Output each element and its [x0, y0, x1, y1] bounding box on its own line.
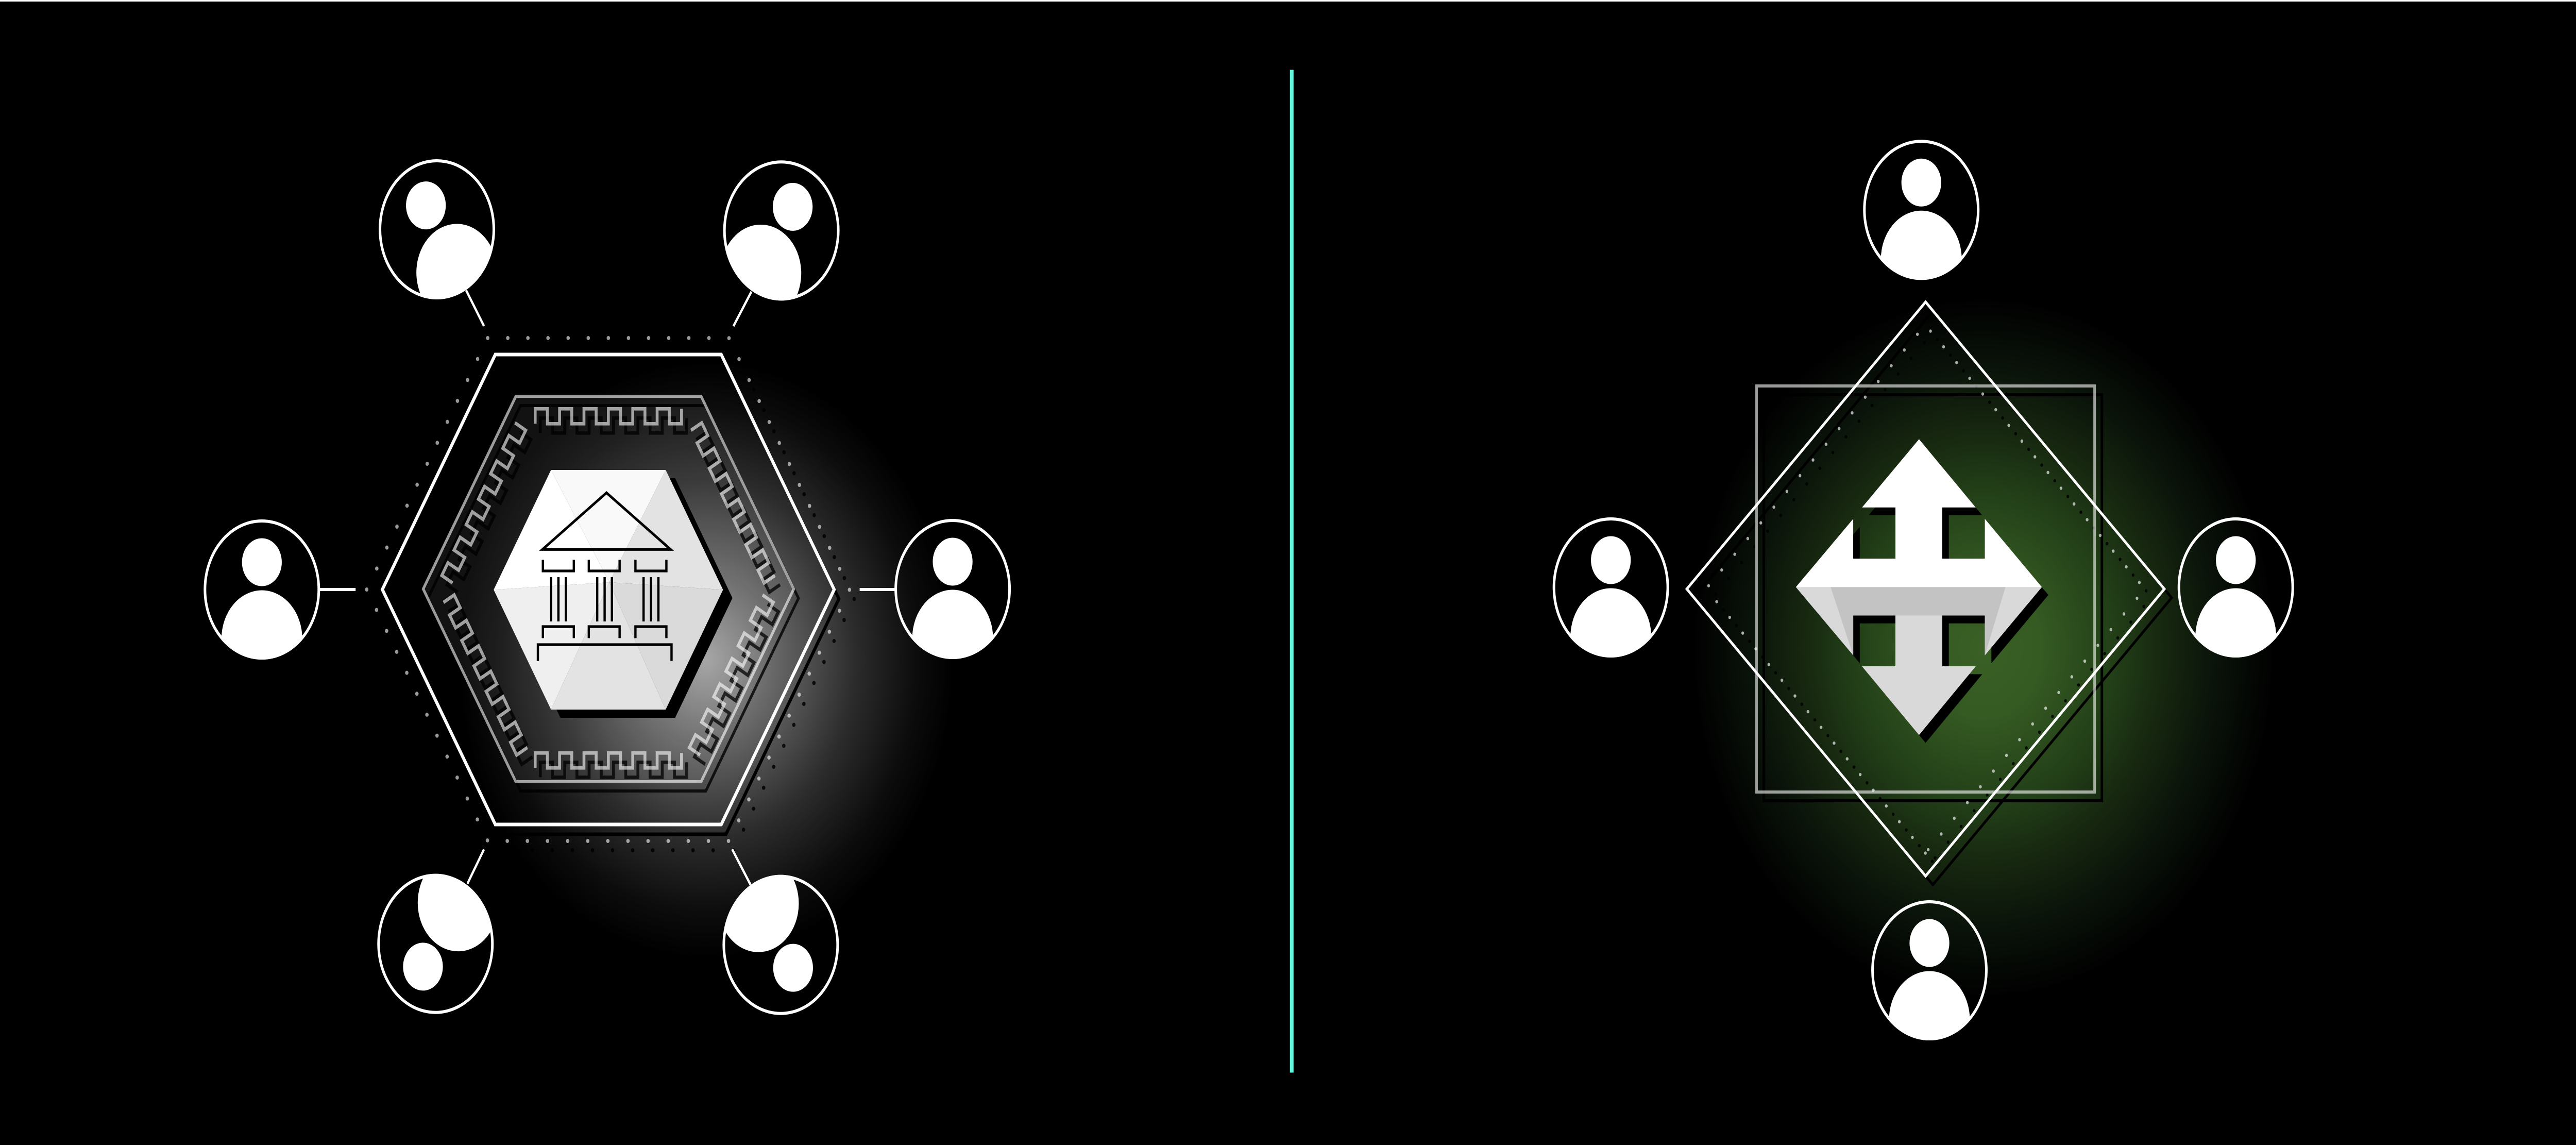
icon: user bottom	[1873, 902, 1986, 1069]
panel: centralized hexagon network	[205, 136, 1010, 1040]
icon: four-way arrow	[1796, 439, 2048, 743]
temple plinth	[538, 645, 671, 661]
icon: user right	[2179, 519, 2293, 685]
central hexagon shadow	[503, 478, 733, 718]
connector: top left	[466, 290, 484, 326]
vertical divider	[1290, 70, 1294, 1073]
square frame	[1756, 386, 2095, 792]
arrow shaded facet	[1831, 587, 2006, 655]
icon: temple building	[538, 493, 671, 661]
icon: user bottom right	[689, 825, 859, 1040]
square frame shadow	[1764, 395, 2102, 801]
column flutes	[551, 577, 658, 621]
arrow bottom half	[1796, 587, 2042, 735]
icon: user top right	[691, 137, 859, 350]
top edge line	[0, 0, 2576, 2]
dotted diamond shadow	[1716, 340, 2146, 862]
dotted hexagon	[367, 338, 850, 841]
icon: user left	[205, 521, 319, 687]
column capitals	[543, 560, 666, 571]
diamond frame shadow	[1694, 311, 2172, 885]
inner hexagon shadow	[428, 406, 799, 791]
connector: left	[319, 588, 355, 591]
greek key border	[442, 409, 775, 768]
connector: right	[860, 588, 895, 591]
outer hexagon	[382, 355, 834, 824]
temple pediment	[543, 493, 670, 549]
icon: user top left	[360, 136, 526, 348]
icon: user top	[1865, 141, 1978, 308]
connector: bottom right	[732, 849, 751, 885]
green radial glow	[1693, 297, 2275, 998]
inner hexagon fill	[423, 396, 794, 782]
diamond frame	[1687, 302, 2164, 876]
icon: user left	[1554, 519, 1668, 685]
panel: decentralized diamond network	[1554, 141, 2293, 1068]
arrow shadow	[1803, 447, 2048, 743]
white radial glow	[458, 361, 954, 958]
dotted diamond	[1708, 331, 2140, 853]
arrow top half	[1796, 439, 2042, 735]
icon: user right	[896, 520, 1010, 687]
column bases	[543, 627, 666, 638]
icon: user bottom left	[357, 824, 528, 1039]
central hexagon with facets	[494, 470, 723, 710]
outer hexagon shadow	[387, 363, 839, 834]
connector: top right	[734, 292, 751, 326]
inner hexagon	[423, 396, 794, 782]
dotted hexagon shadow	[371, 347, 854, 850]
connector: bottom left	[467, 849, 484, 884]
greek key border shadow	[447, 418, 780, 777]
